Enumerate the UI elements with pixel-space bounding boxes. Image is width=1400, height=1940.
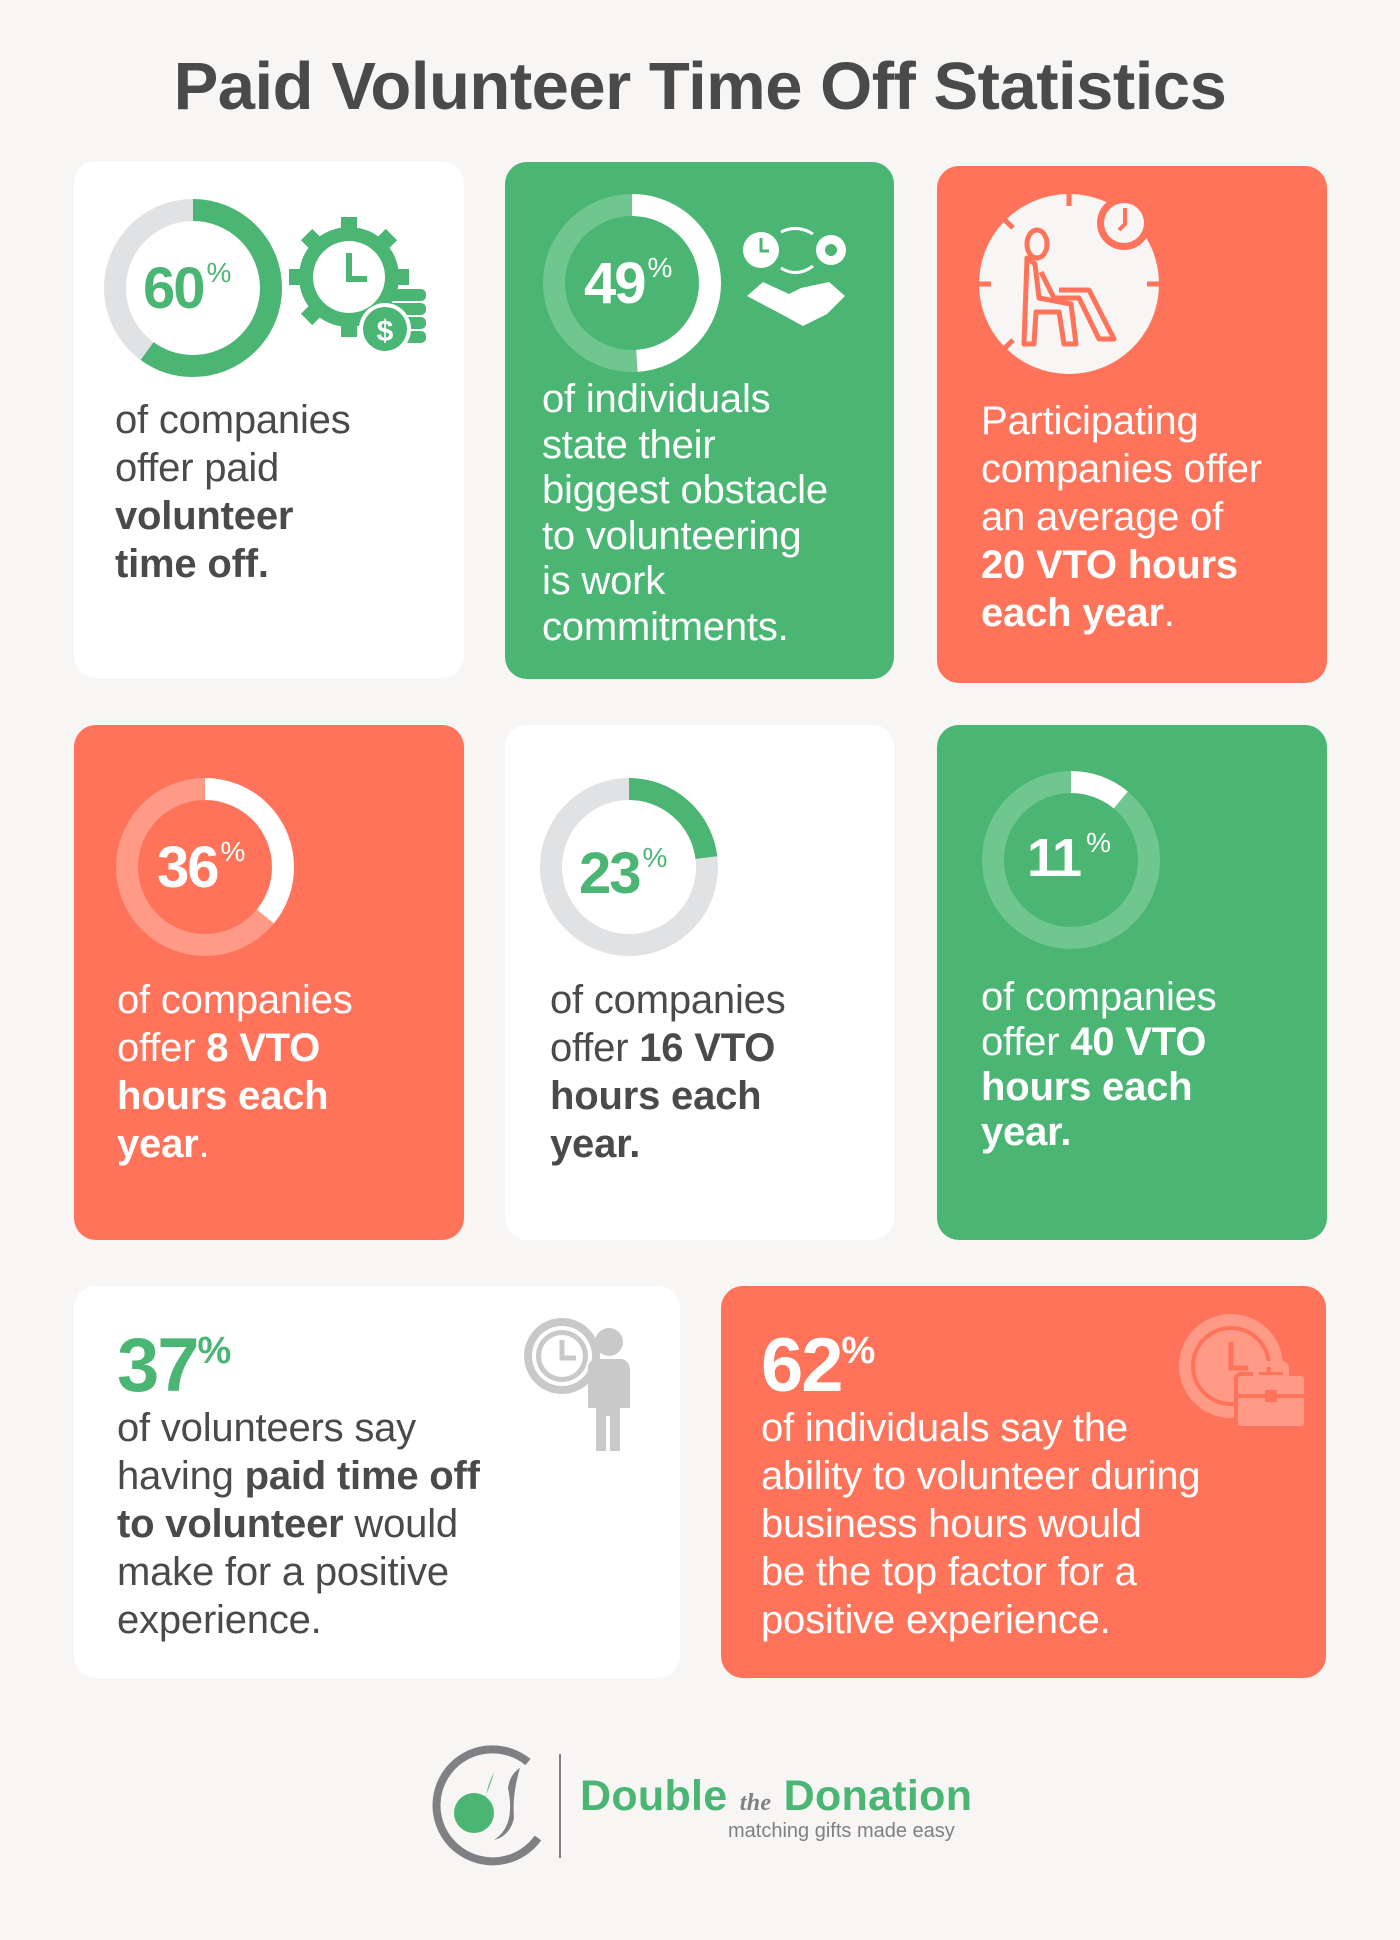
text: offer 8 VTO	[117, 1026, 320, 1070]
text: companies offer	[981, 447, 1262, 491]
text: of individuals say the	[761, 1406, 1128, 1450]
text: offer 40 VTO	[981, 1020, 1206, 1064]
text: be the top factor for a	[761, 1550, 1137, 1594]
icon: person in chair with clock	[979, 194, 1159, 374]
panel: 49% individuals	[505, 162, 894, 679]
text: of companies	[115, 398, 351, 442]
icon: gear clock with coins	[289, 217, 426, 351]
panel: 36% 8 VTO hours	[74, 725, 464, 1240]
text: year.	[981, 1110, 1071, 1154]
ring 36%	[116, 778, 294, 956]
text: of companies	[117, 978, 353, 1022]
text	[981, 399, 1262, 635]
text: year.	[550, 1122, 640, 1166]
stat 37%: 37%	[117, 1323, 229, 1408]
panel: 62% individuals	[721, 1286, 1326, 1678]
text	[550, 978, 786, 1166]
ring 23%: 23	[579, 841, 640, 906]
text: volunteer	[115, 494, 293, 538]
text	[117, 978, 353, 1166]
ring 23%: %	[643, 842, 667, 873]
ring 60%	[104, 199, 282, 377]
ring 36%: 36	[157, 835, 218, 900]
text: an average of	[981, 495, 1223, 539]
ring 11%: %	[1086, 827, 1110, 858]
text: hours each	[117, 1074, 328, 1118]
text: hours each	[981, 1065, 1192, 1109]
text: of individuals	[542, 377, 770, 421]
text: business hours would	[761, 1502, 1142, 1546]
divider	[559, 1754, 561, 1858]
text: make for a positive	[117, 1550, 449, 1594]
text: offer paid	[115, 446, 279, 490]
text: to volunteer would	[117, 1502, 458, 1546]
wordmark: Double the Donation	[580, 1772, 972, 1820]
panel: 23% 16 VTO hours	[505, 725, 894, 1240]
ring 36%: %	[221, 836, 245, 867]
text	[117, 1406, 480, 1642]
ring 60%: 60	[143, 256, 204, 321]
title: Paid Volunteer Time Off Statistics	[174, 49, 1226, 124]
text: to volunteering	[542, 514, 801, 558]
text: of companies	[981, 975, 1217, 1019]
text: each year.	[981, 591, 1175, 635]
icon: handshake with clock and gear	[743, 226, 846, 326]
text: year.	[117, 1122, 209, 1166]
text: hours each	[550, 1074, 761, 1118]
text	[542, 377, 828, 648]
text: of companies	[550, 978, 786, 1022]
text: positive experience.	[761, 1598, 1111, 1642]
icon: person with clock	[524, 1318, 630, 1451]
panel: 20 VTO hours average	[937, 166, 1327, 683]
logo: Double the Donation	[432, 1745, 972, 1866]
text: commitments.	[542, 604, 789, 648]
text	[761, 1406, 1200, 1642]
text: ability to volunteer during	[761, 1454, 1200, 1498]
ring 11%: 11	[1027, 828, 1080, 888]
panel: 37% volunteers	[74, 1286, 680, 1678]
text: Participating	[981, 399, 1199, 443]
icon: clock with briefcase	[1179, 1314, 1304, 1426]
panel: 11% 40 VTO hours	[937, 725, 1327, 1240]
ring 49%	[543, 194, 721, 372]
ring 49%: %	[648, 252, 672, 283]
text: 20 VTO hours	[981, 543, 1238, 587]
text: state their	[542, 422, 715, 466]
text: experience.	[117, 1598, 322, 1642]
text: offer 16 VTO	[550, 1026, 775, 1070]
ring 60%: %	[207, 257, 231, 288]
logo mark	[432, 1745, 542, 1866]
ring 23%	[540, 778, 718, 956]
icon: gear clock with coins: $	[377, 315, 394, 348]
text	[981, 975, 1217, 1154]
ring 11%	[982, 771, 1160, 949]
text: time off.	[115, 542, 269, 586]
stat 62%: 62%	[761, 1323, 873, 1408]
text: biggest obstacle	[542, 468, 828, 512]
tagline: matching gifts made easy	[728, 1820, 955, 1842]
text: having paid time off	[117, 1454, 480, 1498]
ring 49%: 49	[584, 251, 645, 316]
text	[115, 398, 351, 586]
text: of volunteers say	[117, 1406, 416, 1450]
text: is work	[542, 559, 665, 603]
panel: 60% companies	[74, 161, 464, 678]
